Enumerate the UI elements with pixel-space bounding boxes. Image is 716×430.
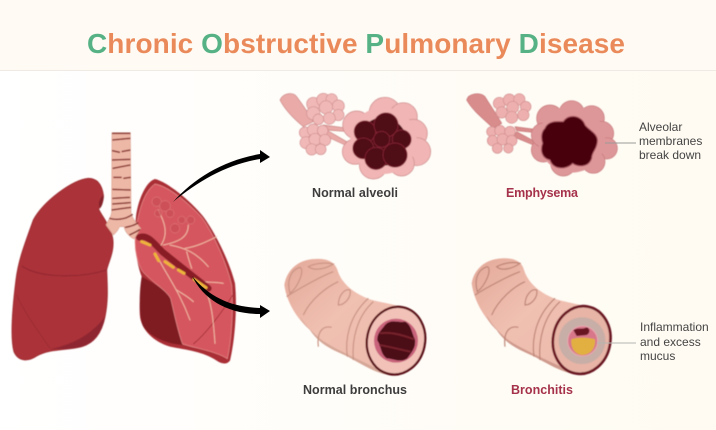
callout: alveolar membranes bbox=[605, 120, 702, 162]
bronchial tree bbox=[139, 237, 208, 288]
callout: alveolar membranes: membranes bbox=[639, 134, 702, 148]
title: Chronic Obstructive Pulmonary Disease bbox=[87, 28, 625, 59]
label: emphysema: Emphysema bbox=[506, 186, 579, 200]
callout: inflammation: and excess bbox=[640, 335, 701, 349]
bronchiole tube bbox=[467, 94, 502, 128]
illustration: lungs with trachea bbox=[12, 133, 236, 364]
illustration: normal bronchus bbox=[284, 259, 431, 380]
callout: inflammation bbox=[597, 320, 709, 363]
label: normal bronchus: Normal bronchus bbox=[303, 383, 407, 397]
callout: inflammation: Inflammation bbox=[640, 320, 709, 334]
callout: alveolar membranes: break down bbox=[639, 148, 701, 162]
trachea bbox=[106, 133, 141, 239]
illustration: normal alveoli bbox=[280, 93, 431, 179]
right lung bbox=[135, 179, 236, 364]
left lung bbox=[12, 178, 113, 360]
small alveolar clusters bbox=[299, 93, 344, 155]
airway opening bbox=[361, 301, 431, 380]
large alveolar sac bbox=[531, 101, 617, 176]
label: bronchitis: Bronchitis bbox=[511, 383, 573, 397]
callout: inflammation: mucus bbox=[640, 349, 675, 363]
small alveolar clusters bbox=[487, 94, 531, 153]
inflamed airway opening bbox=[548, 302, 616, 378]
dark enlarged cavity bbox=[541, 116, 597, 168]
arrow: to bronchus bbox=[192, 276, 270, 318]
large alveolar sac bbox=[342, 97, 431, 179]
arrow: to alveoli bbox=[173, 150, 270, 202]
dark alveoli bbox=[353, 113, 411, 169]
illustration: emphysema bbox=[467, 94, 617, 176]
callout: alveolar membranes: Alveolar bbox=[639, 120, 682, 134]
illustration: bronchitis bbox=[472, 258, 616, 378]
label: normal alveoli: Normal alveoli bbox=[312, 186, 398, 200]
bronchiole tube bbox=[280, 94, 313, 127]
